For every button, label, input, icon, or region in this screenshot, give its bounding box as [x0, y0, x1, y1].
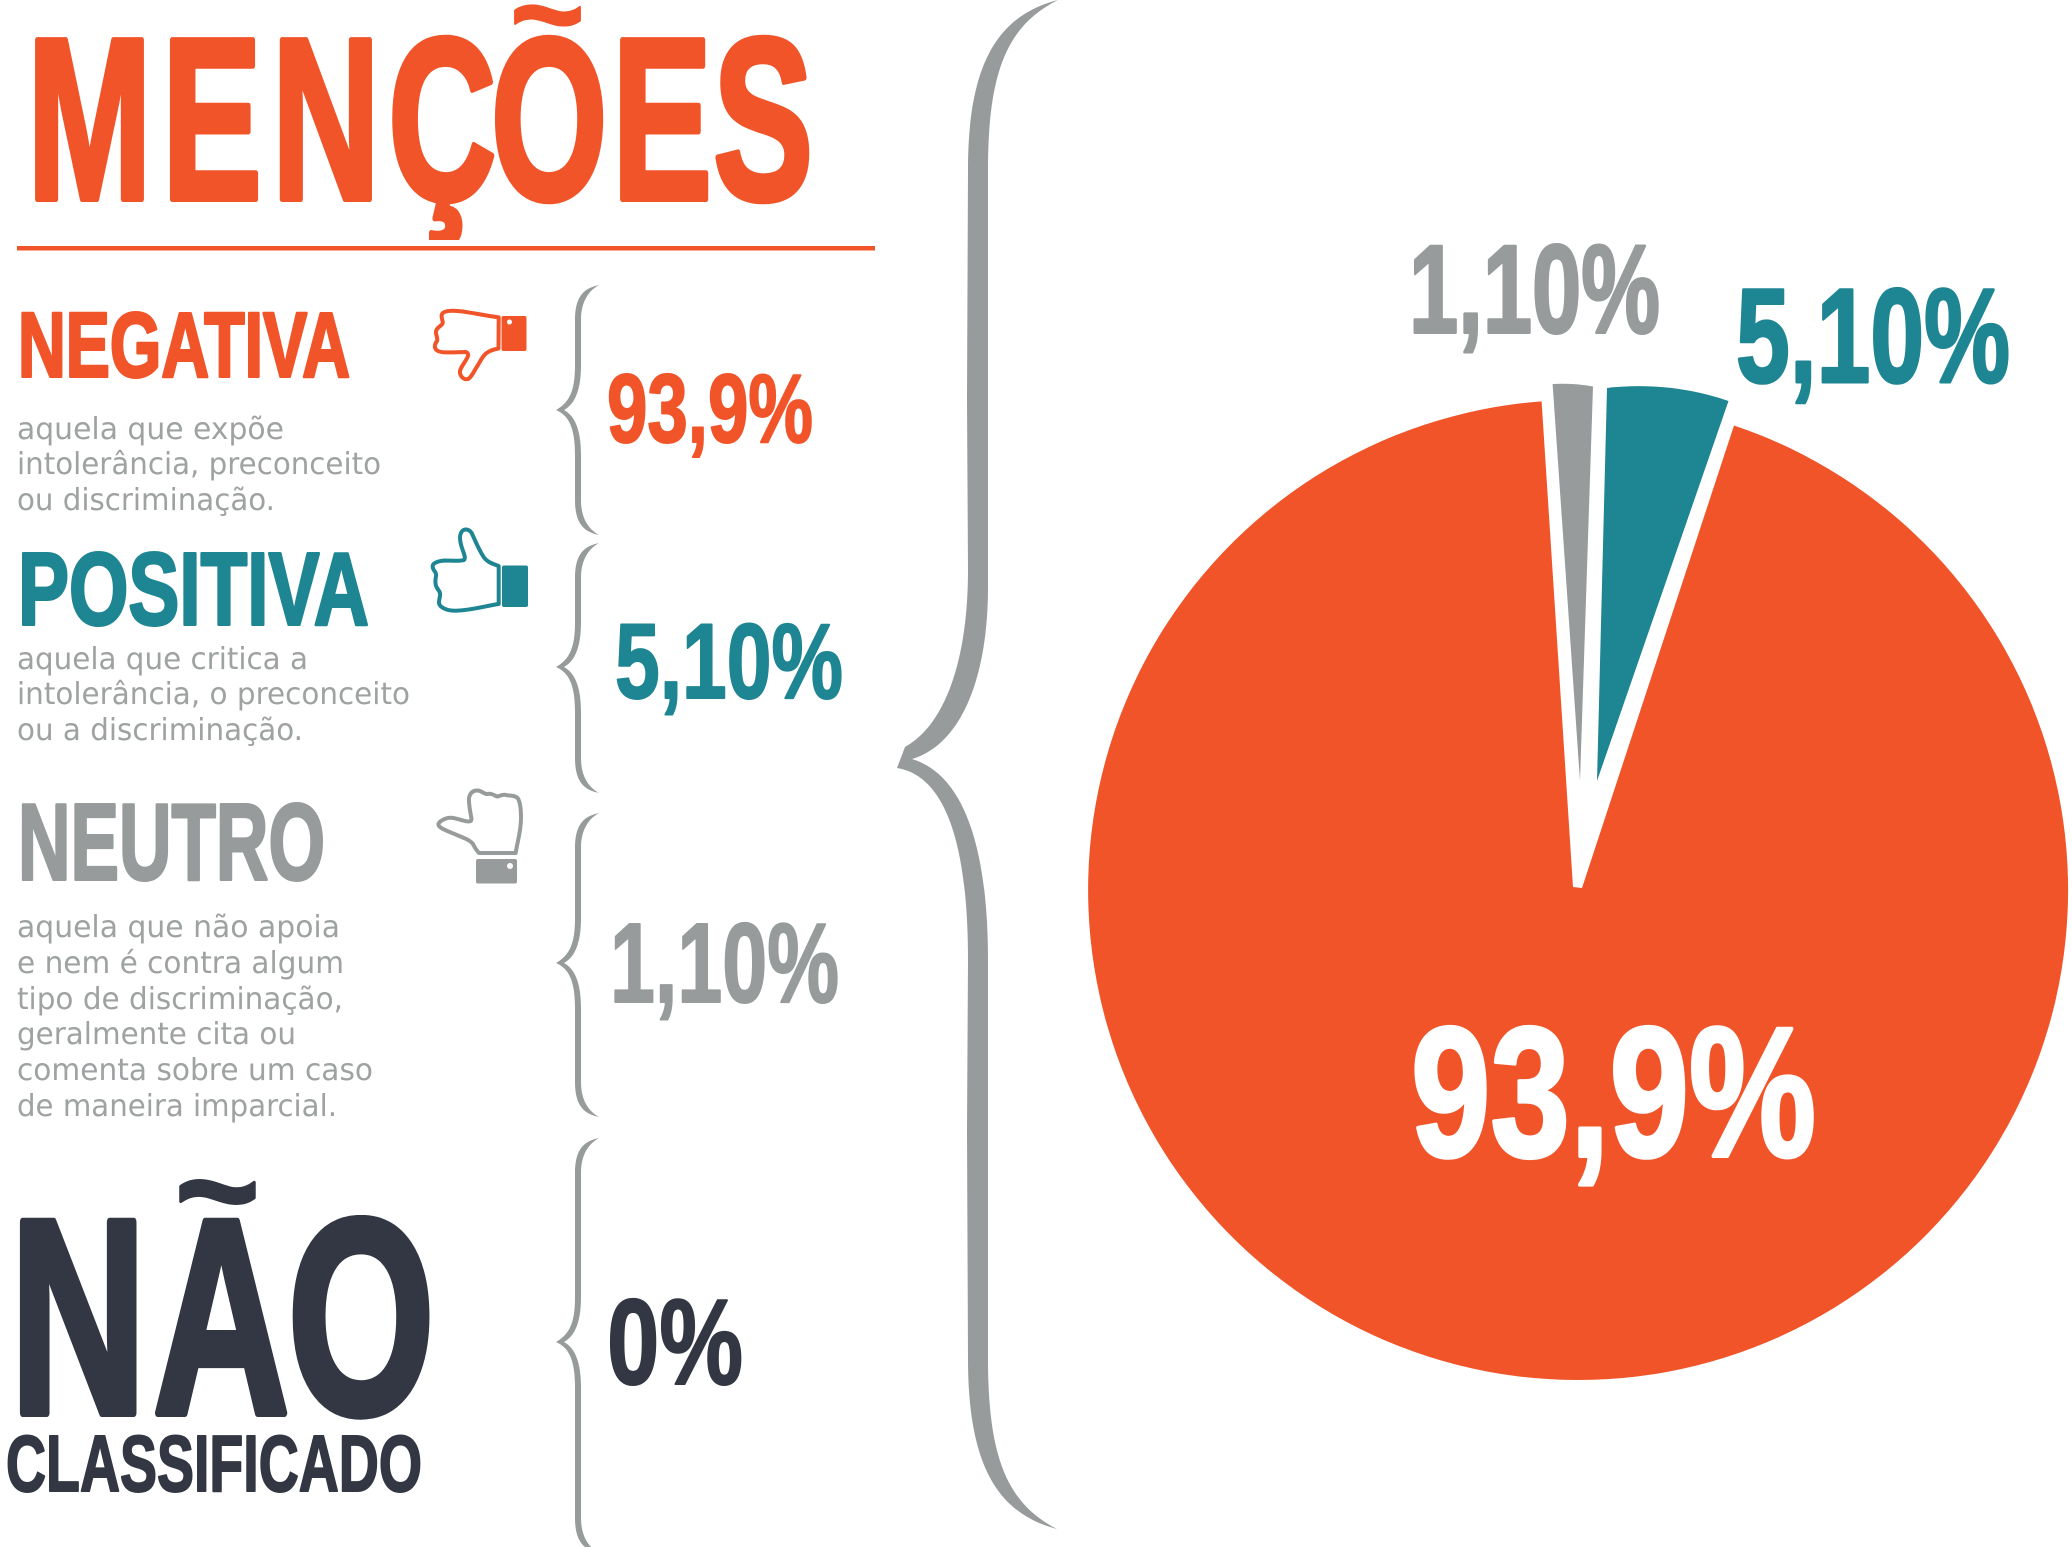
description: neutro: aquela que não apoia — [17, 910, 340, 945]
bracket: neutro — [556, 813, 599, 1117]
description: neutro: geralmente cita ou — [17, 1017, 296, 1052]
heading: positiva: POSITIVA — [18, 532, 369, 646]
description: positiva — [17, 642, 410, 748]
slice: negativa 93,9% — [1088, 401, 2068, 1380]
description: negativa: aquela que expõe — [17, 412, 284, 447]
bracket: positiva — [556, 543, 599, 793]
description: neutro — [17, 910, 373, 1124]
slice: positiva 5,10% — [1597, 386, 1728, 781]
description: negativa — [17, 412, 381, 518]
large bracket — [897, 0, 1058, 1529]
description: positiva: ou a discriminação. — [17, 713, 303, 748]
icon: sideways thumb — [438, 790, 521, 884]
description: neutro: tipo de discriminação, — [17, 982, 343, 1017]
description: positiva: aquela que critica a — [17, 642, 308, 677]
slice: neutro 1,10% — [1553, 384, 1593, 781]
panel: negativa — [17, 285, 813, 535]
icon: thumbs down — [435, 311, 526, 379]
value: neutro: 1,10% — [610, 900, 839, 1026]
description: negativa: intolerância, preconceito — [17, 447, 381, 482]
pie label: 1,10%: 1,10% — [1409, 220, 1660, 360]
value: nao classificado: 0% — [607, 1274, 743, 1410]
panel: positiva — [17, 529, 843, 793]
value: negativa: 93,9% — [607, 354, 813, 463]
heading: neutro: NEUTRO — [18, 782, 325, 904]
heading: nao: NÃO — [10, 1163, 435, 1473]
heading: nao: ~ — [175, 1109, 260, 1271]
description: neutro: e nem é contra algum — [17, 946, 344, 981]
value: positiva: 5,10% — [615, 601, 843, 721]
heading: negativa: NEGATIVA — [18, 294, 350, 396]
subheading: classificado: CLASSIFICADO — [6, 1419, 422, 1508]
panel: nao classificado — [6, 1109, 743, 1547]
description: neutro: comenta sobre um caso — [17, 1053, 373, 1088]
icon: thumbs up — [433, 529, 528, 611]
bracket: nao classificado — [556, 1138, 599, 1547]
pie chart — [1088, 220, 2068, 1380]
description: positiva: intolerância, o preconceito — [17, 677, 410, 712]
panel: neutro — [17, 782, 839, 1124]
bracket: negativa — [556, 285, 599, 535]
pie label: 93,9%: 93,9% — [1411, 990, 1816, 1196]
description: negativa: ou discriminação. — [17, 483, 275, 518]
description: neutro: de maneira imparcial. — [17, 1089, 337, 1124]
